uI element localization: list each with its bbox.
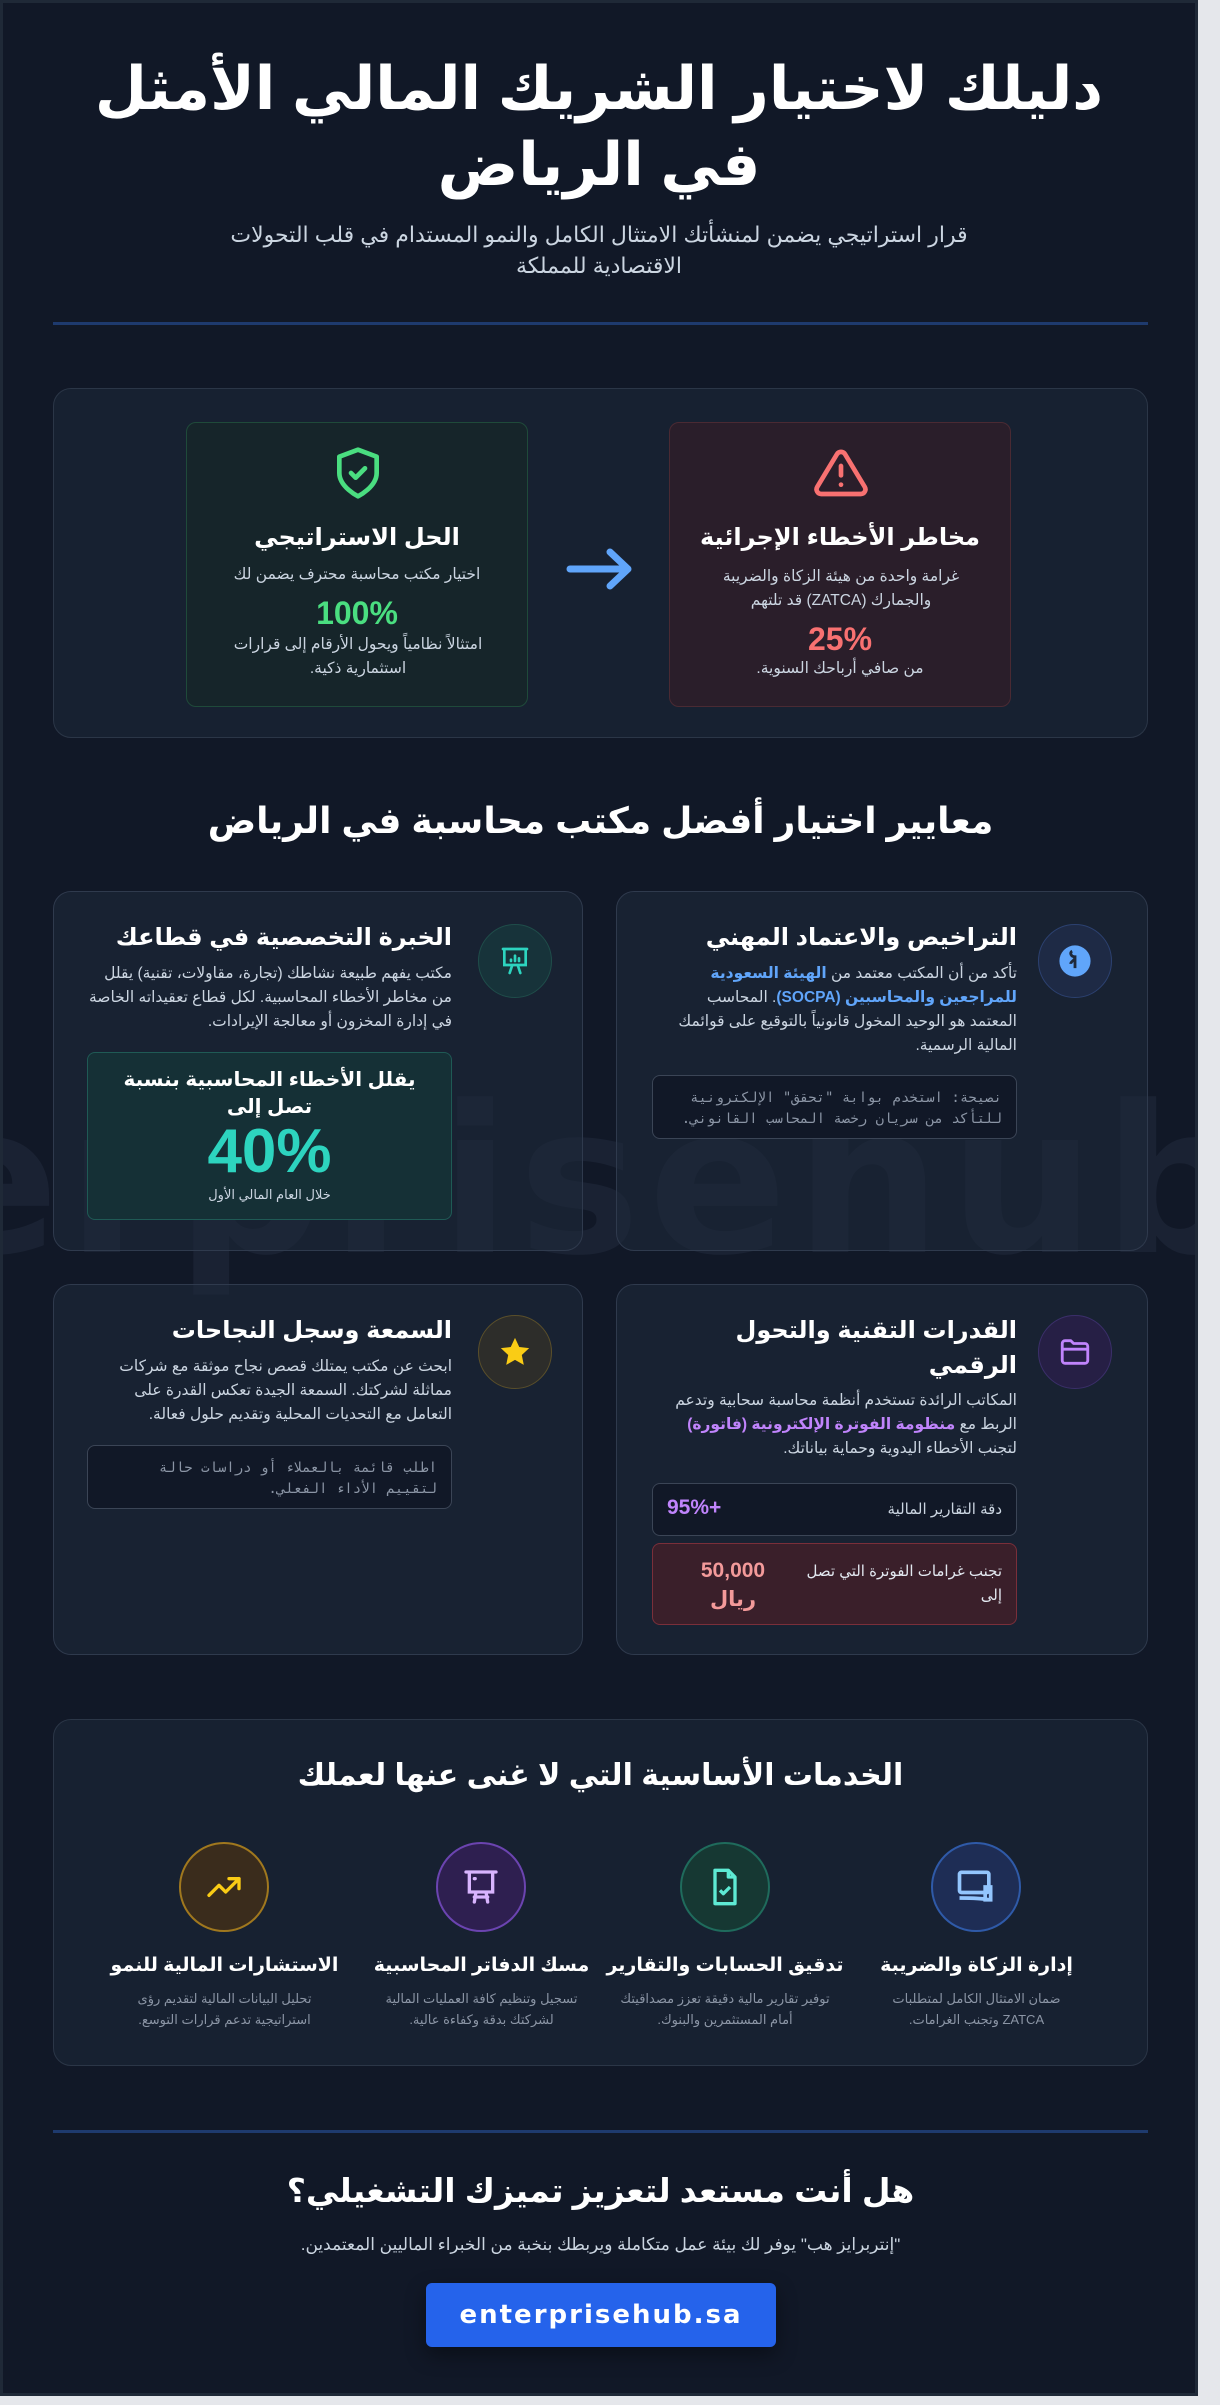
text: تأكد من أن المكتب معتمد من الهيئة السعودية للمراجعين والمحاسبين (SOCPA). المحاسب المعتمد هو الوحيد المخول قانونياً بالتوقيع على قوائمك المالية الرسمية. xyxy=(678,965,1017,1054)
stat: fines xyxy=(652,1543,1017,1625)
tip: نصيحة: استخدم بوابة "تحقق" الإلكترونية للتأكد من سريان رخصة المحاسب القانوني. xyxy=(682,1090,1002,1127)
service: consulting: الاستشارات المالية للنمو xyxy=(111,1955,338,1976)
icon: tax xyxy=(931,1842,1021,1932)
stat box 40%: 40% xyxy=(207,1117,332,1186)
title: دليلك لاختيار الشريك المالي الأمثل في الرياض xyxy=(95,55,1103,198)
card: solution: اختيار مكتب محاسبة محترف يضمن لك xyxy=(234,566,480,583)
tip xyxy=(87,1445,452,1509)
arrow xyxy=(566,548,632,590)
title: التراخيص والاعتماد المهني xyxy=(706,924,1017,951)
service: zakat: ضمان الامتثال الكامل لمتطلبات ZATCA وتجنب الغرامات. xyxy=(892,1991,1061,2027)
service: audit: تدقيق الحسابات والتقارير xyxy=(606,1955,844,1976)
stat box 40% xyxy=(87,1052,452,1220)
heading: الخدمات الأساسية التي لا غنى عنها لعملك xyxy=(298,1759,903,1792)
stat 100%: 100% xyxy=(316,595,398,631)
text: غرامة واحدة من هيئة الزكاة والضريبة والجمارك (ZATCA) قد تلتهم xyxy=(723,568,959,609)
stat: fines: تجنب غرامات الفوترة التي تصل إلى xyxy=(806,1563,1002,1604)
button xyxy=(426,2283,776,2347)
icon: shield xyxy=(337,447,379,499)
card: risks xyxy=(669,422,1011,707)
stat: accuracy xyxy=(652,1483,1017,1536)
icon: globe xyxy=(1038,924,1112,998)
service: bookkeeping: تسجيل وتنظيم كافة العمليات المالية لشركتك بدقة وكفاءة عالية. xyxy=(386,1991,577,2027)
title: السمعة وسجل النجاحات xyxy=(172,1317,452,1344)
stat box 40%: خلال العام المالي الأول xyxy=(208,1187,331,1202)
icon: file check xyxy=(680,1842,770,1932)
subtitle: قرار استراتيجي يضمن لمنشأتك الامتثال الكامل والنمو المستدام في قلب التحولات الاقتصادية للمملكة xyxy=(230,222,968,278)
panel: services xyxy=(53,1719,1148,2066)
text: ابحث عن مكتب يمتلك قصص نجاح موثقة مع شركات مماثلة لشركتك. السمعة الجيدة تعكس القدرة على التعامل مع التحديات المحلية وتقديم حلول فعالة. xyxy=(119,1358,452,1423)
tip: اطلب قائمة بالعملاء أو دراسات حالة لتقييم الأداء الفعلي. xyxy=(159,1460,437,1497)
icon: folder xyxy=(1038,1315,1112,1389)
service: bookkeeping xyxy=(374,1842,589,2028)
heading: مخاطر الأخطاء الإجرائية xyxy=(700,524,980,551)
icon: star xyxy=(478,1315,552,1389)
stat: fines: 50,000 ريال xyxy=(701,1559,765,1611)
card: reputation xyxy=(53,1284,583,1655)
heading: criteria: معايير اختيار أفضل مكتب محاسبة في الرياض xyxy=(208,800,993,841)
text: مكتب يفهم طبيعة نشاطك (تجارة، مقاولات، تقنية) يقلل من مخاطر الأخطاء المحاسبية. لكل قطاع تعقيداته الخاصة في إدارة المخزون أو معالجة الإيرادات. xyxy=(89,965,452,1030)
card: solution: امتثالاً نظامياً ويحول الأرقام إلى قرارات استثمارية ذكية. xyxy=(234,636,482,677)
stat box 40%: يقلل الأخطاء المحاسبية بنسبة تصل إلى xyxy=(123,1069,416,1118)
card: solution xyxy=(186,422,528,707)
service: zakat: إدارة الزكاة والضريبة xyxy=(880,1955,1073,1976)
service: audit xyxy=(606,1842,844,2028)
icon: trend xyxy=(179,1842,269,1932)
text: المكاتب الرائدة تستخدم أنظمة محاسبة سحابية وتدعم الربط مع منظومة الفوترة الإلكترونية (فاتورة) لتجنب الأخطاء اليدوية وحماية بياناتك. xyxy=(675,1392,1017,1457)
card: sector expertise xyxy=(53,891,583,1251)
icon: board xyxy=(436,1842,526,1932)
service: audit: توفير تقارير مالية دقيقة تعزز مصداقيتك أمام المستثمرين والبنوك. xyxy=(620,1991,830,2027)
card: risks: من صافي أرباحك السنوية. xyxy=(756,660,924,677)
CTA heading: هل أنت مستعد لتعزيز تميزك التشغيلي؟ xyxy=(287,2172,914,2209)
heading: الحل الاستراتيجي xyxy=(254,524,460,551)
service: consulting: تحليل البيانات المالية لتقديم رؤى استراتيجية تدعم قرارات التوسع. xyxy=(138,1991,311,2027)
stat: accuracy: دقة التقارير المالية xyxy=(888,1501,1002,1518)
icon: presentation xyxy=(478,924,552,998)
stat 25%: 25% xyxy=(808,621,872,657)
title: الخبرة التخصصية في قطاعك xyxy=(116,924,452,951)
CTA text: "إنتربرايز هب" يوفر لك بيئة عمل متكاملة ويربطك بنخبة من الخبراء الماليين المعتمدين. xyxy=(301,2235,900,2254)
service: zakat xyxy=(880,1842,1073,2028)
icon: warning xyxy=(814,450,868,496)
service: consulting xyxy=(110,1842,338,2028)
card: licensing xyxy=(616,891,1148,1251)
panel: comparison xyxy=(53,388,1148,738)
button: enterprisehub.sa xyxy=(459,2300,742,2330)
stat: accuracy: 95%+ xyxy=(667,1496,721,1519)
tip xyxy=(652,1075,1017,1139)
service: bookkeeping: مسك الدفاتر المحاسبية xyxy=(374,1955,589,1976)
title: القدرات التقنية والتحول الرقمي xyxy=(736,1317,1017,1379)
card: technology xyxy=(616,1284,1148,1655)
